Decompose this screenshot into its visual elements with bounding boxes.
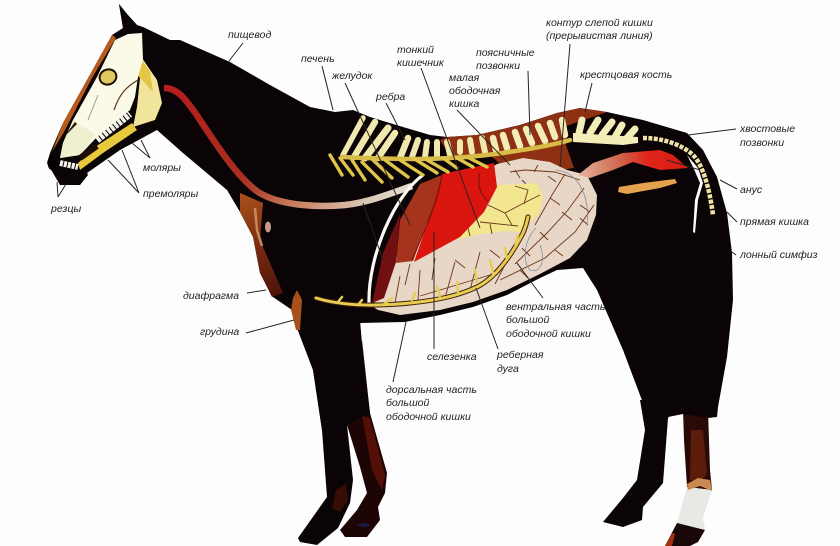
- intestine folds: [468, 186, 540, 236]
- label: крестцовая кость: [580, 69, 672, 112]
- label: хвостовые позвонки: хвостовые: [739, 123, 795, 135]
- label: диафрагма: [183, 290, 266, 302]
- label: премоляры: [108, 150, 199, 200]
- label: премоляры: премоляры: [143, 188, 199, 200]
- white sock tan band: [687, 478, 712, 491]
- label: реберная дуга: реберная: [496, 349, 544, 361]
- label: поясничные позвонки: поясничные: [476, 47, 535, 59]
- label: хвостовые позвонки: позвонки: [740, 137, 784, 149]
- body: [47, 4, 733, 430]
- rib ends: [338, 235, 518, 305]
- cecum contour: [525, 170, 587, 271]
- near front leg: [295, 320, 370, 545]
- label: дорсальная часть большой ободочной кишки: дорсальная часть: [386, 384, 477, 396]
- ear: [119, 4, 137, 28]
- nasal notch: [64, 122, 77, 137]
- large colon: [373, 158, 597, 315]
- head skeleton: [48, 4, 162, 185]
- label: прямая кишка: прямая кишка: [740, 216, 809, 228]
- leg colouring: [240, 193, 712, 546]
- label: грудина: грудина: [200, 326, 239, 338]
- label: лонный симфиз: лонный симфиз: [739, 249, 818, 261]
- label: вентральная часть большой ободочной кишки: [506, 263, 605, 340]
- esophagus: [164, 88, 412, 206]
- rectum: [578, 150, 688, 178]
- label: вентральная часть большой ободочной кишки: ободочной кишки: [506, 328, 591, 340]
- vertebral column: [342, 140, 570, 159]
- label: тонкий кишечник: кишечник: [397, 57, 445, 69]
- costal arch shadow: [316, 217, 528, 305]
- label: хвостовые позвонки: [688, 123, 795, 149]
- label: ребра: ребра: [375, 91, 405, 103]
- label: грудина: [200, 320, 294, 338]
- label: ребра: [375, 91, 405, 140]
- skull: [60, 33, 143, 158]
- chest highlight: [255, 208, 262, 246]
- eye socket: [97, 67, 119, 87]
- far hind leg: [603, 400, 680, 527]
- label: селезенка: селезенка: [427, 351, 477, 363]
- stomach contour: [412, 173, 488, 260]
- near hind leg: [683, 410, 712, 490]
- pubic symphysis: [618, 179, 677, 194]
- label: тонкий кишечник: [397, 44, 480, 228]
- label: вентральная часть большой ободочной кишки: большой: [506, 314, 550, 326]
- label: диафрагма: диафрагма: [183, 290, 239, 302]
- spine and ribs: [330, 118, 713, 215]
- tail vertebrae: [643, 138, 713, 215]
- colon folds: [395, 165, 594, 303]
- label: контур слепой кишки: [546, 17, 653, 167]
- label: желудок: [331, 70, 410, 225]
- label: анус: анус: [740, 184, 763, 196]
- near hind hoof: [665, 523, 705, 546]
- nostril black: [48, 156, 56, 170]
- far front leg shading: [362, 416, 385, 490]
- incisors: [60, 163, 78, 167]
- hindquarter organs: [578, 150, 703, 233]
- pale muzzle tone: [60, 120, 95, 158]
- label: крестцовая кость: крестцовая кость: [580, 69, 672, 81]
- label: малая ободочная кишка: ободочная: [449, 85, 501, 97]
- blue hoof highlight: [358, 523, 370, 527]
- label: желудок: желудок: [331, 70, 373, 82]
- label: анус: [667, 160, 763, 196]
- label: дорсальная часть большой ободочной кишки: [386, 322, 477, 423]
- liver lobe: [396, 175, 442, 263]
- label: моляры: моляры: [143, 162, 181, 174]
- lower ribs: [330, 155, 487, 182]
- jaw line: [114, 80, 138, 110]
- label: пищевод: пищевод: [228, 29, 271, 41]
- label: контур слепой кишки: контур слепой кишки: [546, 17, 653, 29]
- shoulder tip: [291, 290, 302, 330]
- mouth gap: [80, 146, 97, 158]
- label: дорсальная часть большой ободочной кишки: ободочной кишки: [386, 411, 471, 423]
- small intestine: [457, 183, 543, 240]
- upper ribs: [343, 118, 485, 158]
- diaphragm: [372, 214, 400, 303]
- sacrum body: [573, 133, 638, 145]
- label: вентральная часть большой ободочной кишки: вентральная часть: [506, 301, 605, 313]
- hoof edge: [665, 533, 675, 546]
- label: селезенка: [427, 232, 477, 363]
- back muscle band: [440, 108, 607, 170]
- molars: [97, 114, 130, 140]
- far front leg: [340, 340, 387, 537]
- near front leg shading: [332, 484, 348, 512]
- lower lip: [55, 168, 88, 185]
- label: моляры: [132, 140, 181, 174]
- label: печень: [301, 53, 383, 260]
- hind cannon chestnut: [690, 430, 707, 482]
- label: дорсальная часть большой ободочной кишки: большой: [386, 397, 430, 409]
- white sock: [677, 487, 712, 530]
- cheek yellow: [133, 58, 162, 127]
- intestine body: [457, 183, 543, 240]
- label: прямая кишка: [727, 212, 809, 228]
- sacral spines: [579, 120, 635, 138]
- white arc: [369, 175, 423, 303]
- nose edge: [52, 35, 116, 152]
- label: малая ободочная кишка: [449, 72, 510, 165]
- facial crest: [88, 95, 98, 120]
- stomach: [414, 163, 497, 262]
- label: тонкий кишечник: тонкий: [397, 44, 434, 56]
- label: контур слепой кишки: (прерывистая линия): [546, 30, 653, 42]
- elbow spot: [265, 222, 271, 232]
- label: поясничные позвонки: позвонки: [476, 60, 520, 72]
- sternum and costal arch: [316, 217, 528, 305]
- white gap: [687, 155, 703, 233]
- label: резцы: резцы: [50, 203, 81, 215]
- costal arch: [316, 217, 528, 305]
- label: реберная дуга: дуга: [497, 363, 519, 375]
- chest shading: [240, 193, 283, 297]
- colon body: [373, 158, 597, 315]
- label: реберная дуга: [476, 288, 544, 375]
- label: малая ободочная кишка: кишка: [449, 98, 479, 110]
- label: поясничные позвонки: [476, 47, 535, 135]
- lumbar vertebrae: [493, 120, 565, 150]
- label: печень: печень: [301, 53, 335, 65]
- label: резцы: [50, 182, 81, 215]
- lower jaw yellow: [78, 123, 137, 170]
- label: пищевод: [228, 29, 271, 61]
- cheek deep yellow: [138, 60, 153, 92]
- label: малая ободочная кишка: малая: [449, 72, 480, 84]
